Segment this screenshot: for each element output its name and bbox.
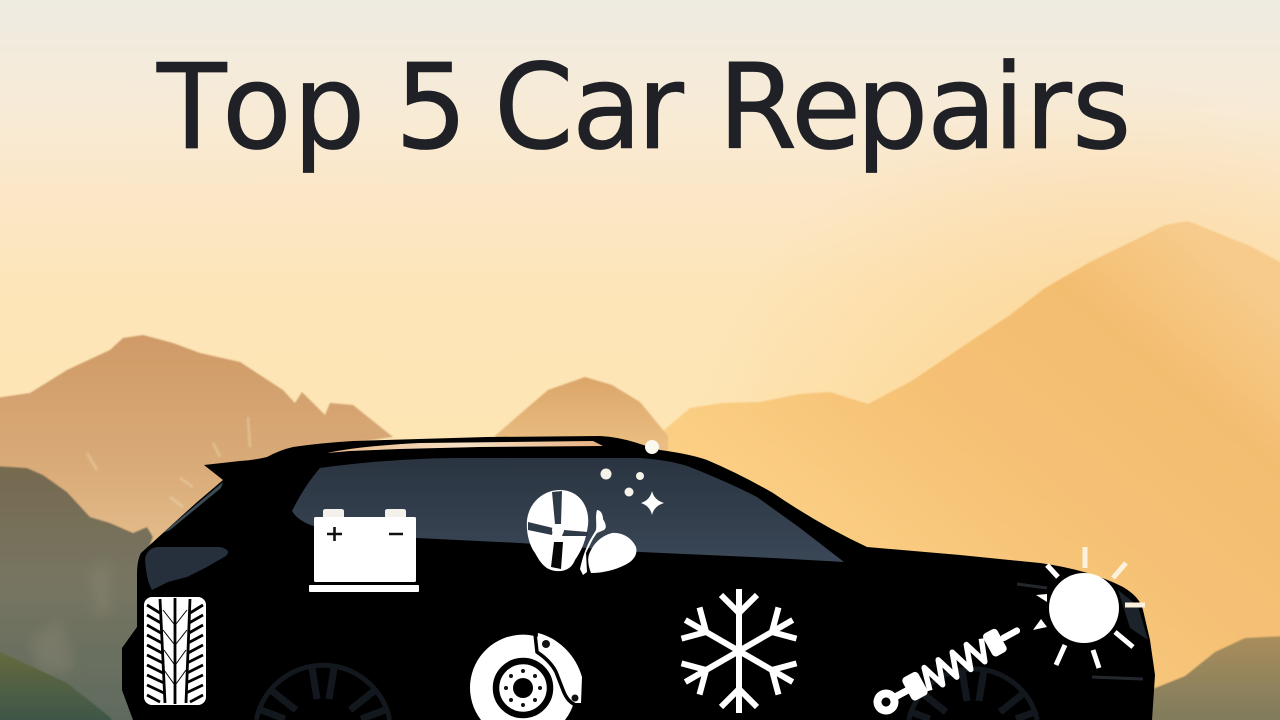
dark foreground mountain bbox=[0, 466, 153, 720]
sun rays on car bbox=[1047, 565, 1133, 668]
left mountain bbox=[0, 335, 393, 560]
upper rod bbox=[1004, 631, 1017, 638]
battery base bbox=[309, 585, 419, 592]
steering wheel bbox=[527, 490, 588, 571]
headlight trim bbox=[1017, 584, 1143, 679]
headlight glass bbox=[1118, 590, 1148, 640]
front wheel bbox=[909, 669, 1037, 720]
rear quarter window bbox=[145, 547, 228, 590]
coil spring bbox=[919, 637, 992, 691]
airbag neck bbox=[580, 510, 606, 575]
middle mountain bbox=[495, 377, 668, 470]
icon: car battery bbox=[309, 509, 419, 592]
icon: snowflake bbox=[676, 589, 802, 713]
caliper bolts bbox=[542, 640, 578, 702]
caliper bbox=[537, 633, 582, 703]
rear wheel bbox=[256, 665, 390, 720]
sun disc bbox=[1049, 573, 1119, 643]
icon: sun bbox=[1033, 547, 1145, 668]
icon: wheel and airbag with sparkles bbox=[527, 440, 664, 575]
disc bbox=[470, 635, 576, 720]
side window bbox=[292, 458, 844, 562]
rear edge glass sliver bbox=[163, 482, 223, 533]
upper housing bbox=[982, 627, 1008, 658]
hub ring bbox=[496, 661, 550, 715]
icon: tire tread bbox=[144, 597, 206, 705]
icon: shock absorber bbox=[872, 619, 1023, 717]
small ray wedges bbox=[1033, 594, 1047, 630]
sun rays over sky bbox=[1085, 547, 1145, 605]
airbag bbox=[588, 533, 636, 573]
battery terminals bbox=[323, 509, 406, 517]
lower rod bbox=[896, 691, 907, 697]
left mountain snow streaks bbox=[87, 417, 250, 507]
title: Top 5 Car Repairs bbox=[156, 40, 1131, 176]
roof rail highlight bbox=[327, 441, 603, 453]
caliper gap bbox=[535, 634, 581, 707]
car silhouette bbox=[122, 436, 1155, 720]
lower eye bbox=[874, 690, 898, 714]
sparkle star bbox=[641, 491, 664, 515]
lower right hill bbox=[1150, 636, 1280, 720]
right mountain bbox=[640, 221, 1280, 720]
dark mountain rock highlight bbox=[30, 560, 112, 675]
plus and minus signs bbox=[327, 527, 403, 541]
hub bolts bbox=[504, 669, 542, 707]
hub centre bbox=[513, 678, 533, 698]
car body bbox=[122, 436, 1155, 720]
battery body bbox=[314, 517, 416, 582]
green foothill bbox=[0, 650, 114, 720]
sparkle dots bbox=[600, 440, 659, 496]
mountain range bbox=[0, 221, 1280, 720]
lower housing bbox=[901, 670, 929, 702]
icon: brake disc bbox=[470, 633, 582, 720]
